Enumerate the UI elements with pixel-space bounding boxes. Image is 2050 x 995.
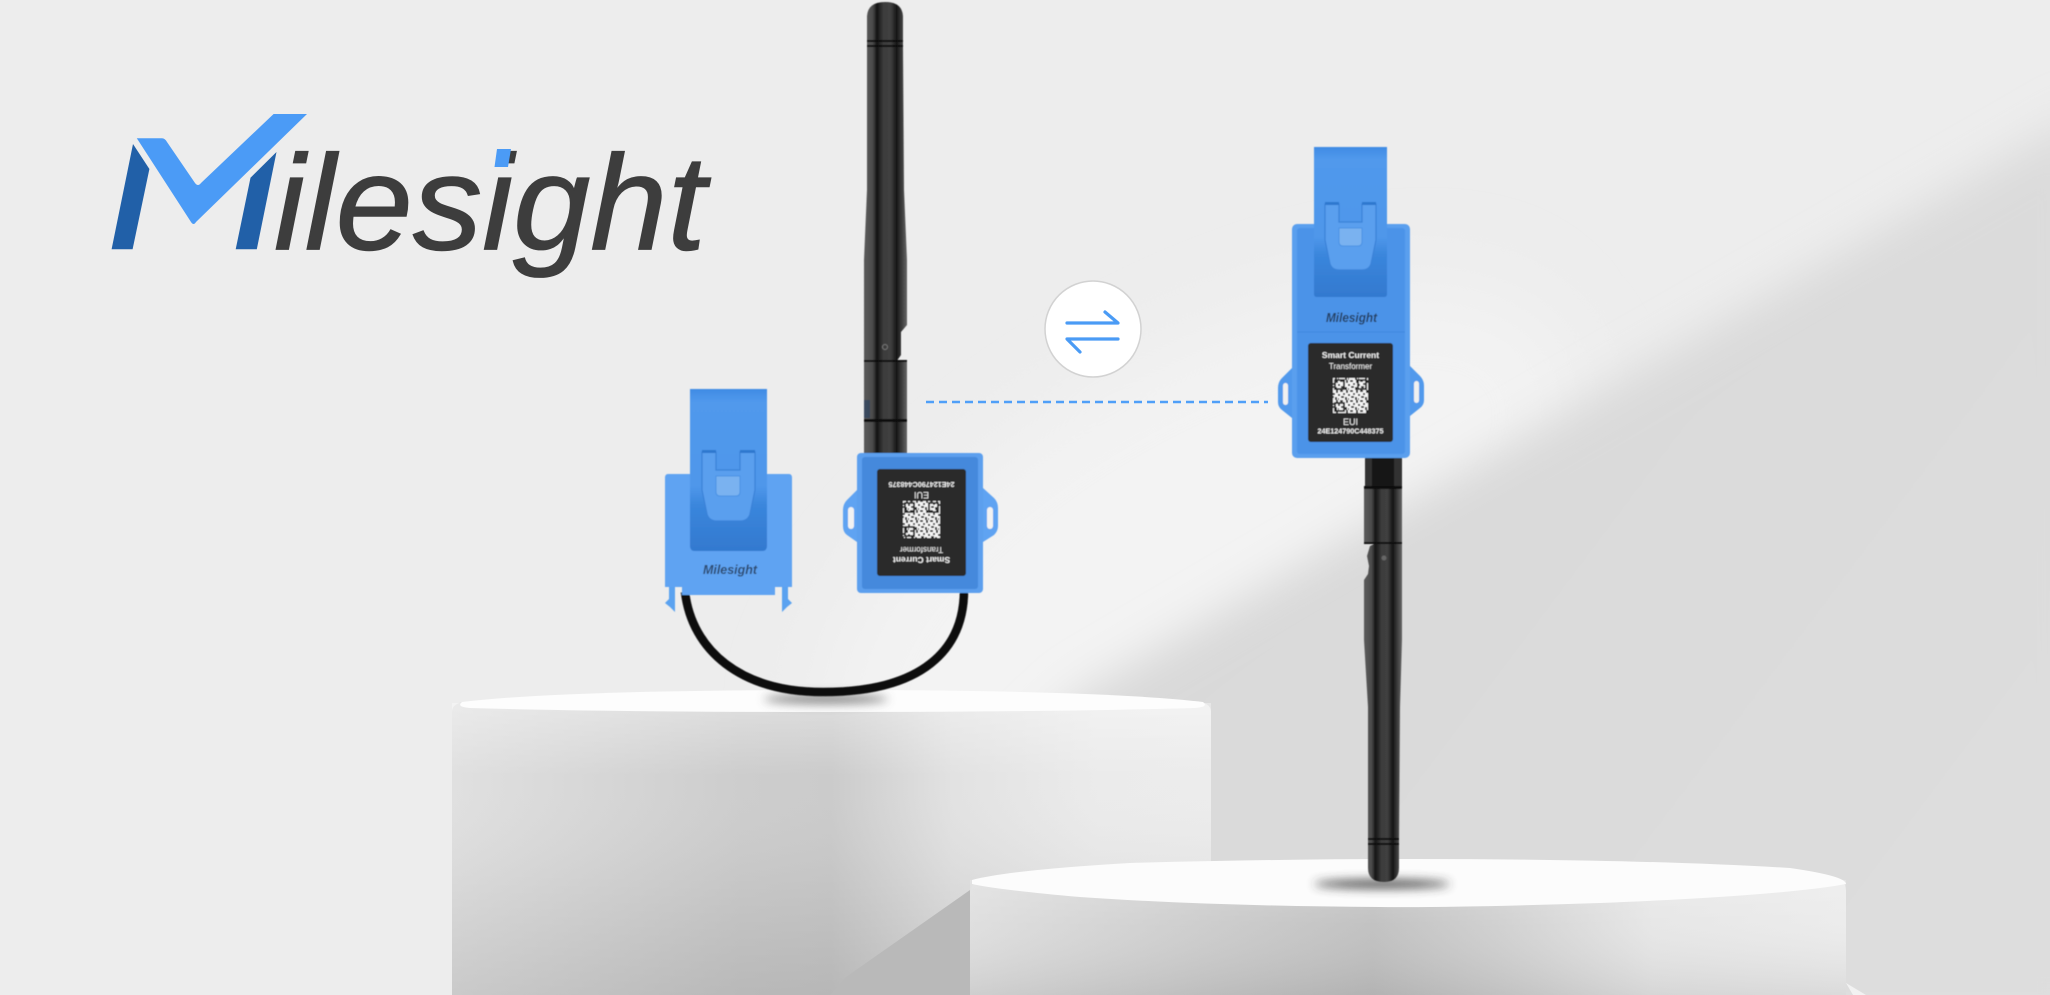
sensor label text: EUI (1343, 417, 1358, 427)
dashed connector (926, 401, 1268, 403)
logo mark: M right stroke (236, 152, 276, 249)
clamp body (665, 474, 792, 595)
sensor ears (1278, 368, 1292, 418)
sensor label text: Transformer (1329, 362, 1372, 371)
clamp strap (1314, 147, 1387, 297)
right antenna shadow (1314, 880, 1450, 888)
sensor label text: 24E124790C448375 (1318, 426, 1383, 436)
clamp pegs (665, 587, 675, 612)
sensor label (1308, 343, 1393, 442)
sensor inverted label text: 24E124790C448375 (889, 480, 954, 489)
sensor inverted label text: Transformer (900, 545, 943, 554)
sensor ears (843, 490, 857, 542)
logo mark: checkmark (137, 114, 307, 224)
clamp latch (1325, 204, 1376, 270)
upside-down sensor (843, 453, 998, 593)
sensor logo: Milesight (1326, 310, 1378, 325)
left pedestal (452, 690, 1211, 995)
sensor label text: Smart Current (1322, 350, 1379, 360)
logo blue i dot (494, 149, 511, 167)
antenna inverted (1364, 458, 1402, 882)
device on left pedestal (665, 2, 998, 692)
sensor label text (1318, 350, 1383, 436)
swap icon (1045, 281, 1141, 377)
antenna upright (864, 2, 907, 453)
sensor body (857, 453, 983, 593)
cable (685, 590, 964, 692)
sensor QR code (903, 501, 940, 538)
device standing on right pedestal (1278, 147, 1424, 882)
Milesight logo (112, 114, 712, 278)
sensor inverted label text: Smart Current (893, 555, 950, 565)
clamp (665, 389, 792, 612)
clamp latch (702, 452, 755, 521)
sensor label (877, 469, 966, 576)
right pedestal (970, 859, 1866, 995)
sensor inverted label text (889, 480, 954, 565)
sensor inverted label text: EUI (914, 490, 929, 500)
logo wordmark: ilesight (274, 127, 712, 278)
clamp logo: Milesight (703, 562, 758, 577)
sensor QR code (1333, 378, 1368, 413)
logo mark: M left stroke (112, 144, 149, 249)
left pedestal cable shadow (764, 694, 888, 704)
clamp strap (690, 389, 767, 551)
sensor body (1292, 224, 1410, 458)
